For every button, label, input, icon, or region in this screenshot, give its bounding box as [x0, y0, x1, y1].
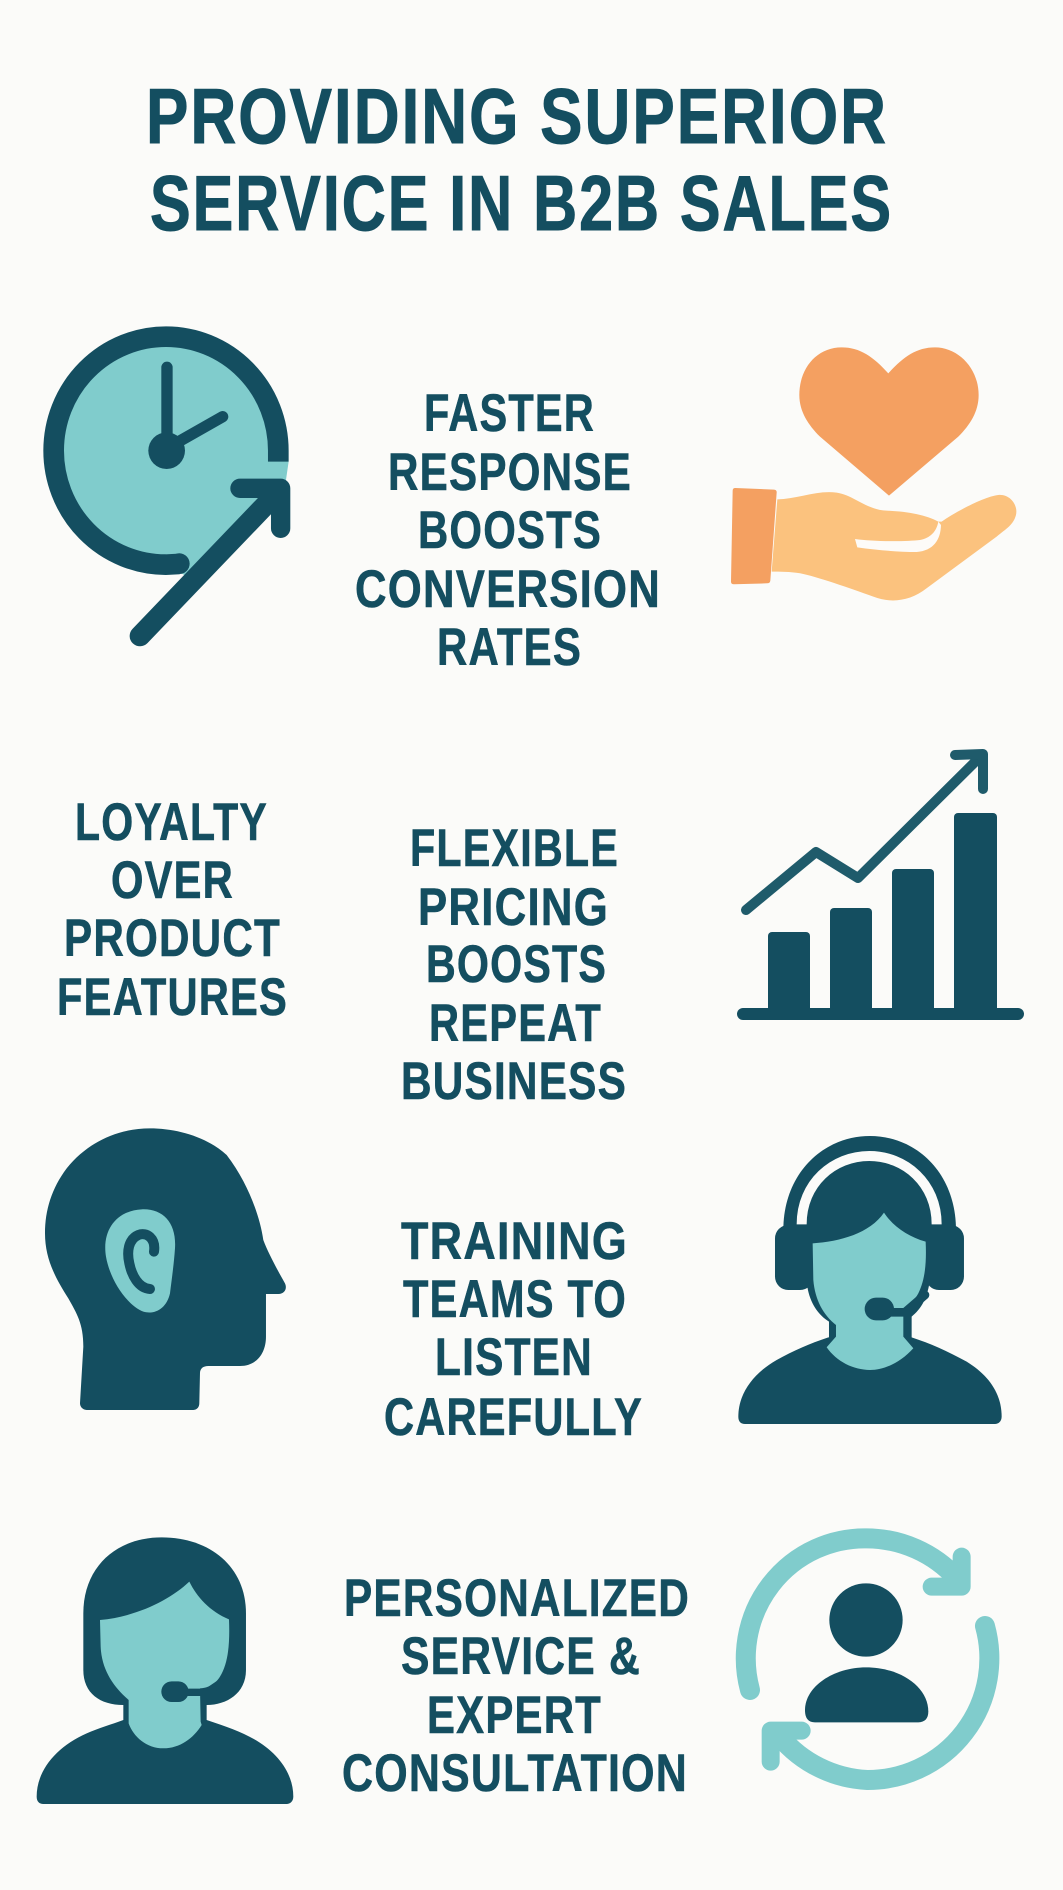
text block: personalized service	[342, 1569, 690, 1803]
title	[146, 72, 893, 247]
text block: flexible pricing: BUSINESS	[401, 1052, 627, 1111]
icon: woman with headset	[37, 1537, 293, 1804]
icon: clock with arrow	[53, 337, 289, 636]
text block: training teams: TEAMS TO	[403, 1270, 627, 1329]
text block: training teams: CAREFULLY	[384, 1388, 643, 1447]
text block: faster response	[355, 384, 661, 677]
text block: flexible pricing: PRICING	[418, 878, 609, 937]
text block: faster response: FASTER	[424, 384, 595, 443]
text block: personalized service: SERVICE &	[401, 1627, 641, 1686]
icon: agent with headset	[738, 1136, 1002, 1424]
text block: faster response: RESPONSE	[388, 443, 632, 502]
title: PROVIDING SUPERIOR	[146, 72, 888, 160]
text block: faster response: RATES	[437, 618, 582, 677]
text block: loyalty over product features	[57, 793, 288, 1027]
text block: training teams: LISTEN	[435, 1328, 593, 1387]
text block: flexible pricing: REPEAT	[429, 994, 602, 1053]
text block: personalized service: PERSONALIZED	[344, 1569, 690, 1628]
text block: loyalty over product features: LOYALTY	[75, 793, 268, 852]
text block: training teams	[384, 1212, 643, 1447]
icon: head with ear	[45, 1128, 286, 1410]
text block: flexible pricing	[401, 819, 627, 1111]
text block: loyalty over product features: FEATURES	[57, 968, 288, 1027]
icon: growth bar chart	[737, 754, 1024, 1020]
icon: hand holding heart	[731, 347, 1016, 600]
text block: training teams: TRAINING	[401, 1212, 628, 1271]
text block: personalized service: CONSULTATION	[342, 1744, 688, 1803]
text block: loyalty over product features: OVER	[111, 851, 234, 910]
text block: loyalty over product features: PRODUCT	[64, 909, 281, 968]
text block: flexible pricing: FLEXIBLE	[410, 819, 619, 878]
text block: personalized service: EXPERT	[427, 1686, 602, 1745]
text block: faster response: CONVERSION	[355, 560, 661, 619]
text block: flexible pricing: BOOSTS	[426, 935, 607, 994]
icon: person in refresh cycle	[746, 1538, 989, 1780]
text block: faster response: BOOSTS	[418, 501, 602, 560]
